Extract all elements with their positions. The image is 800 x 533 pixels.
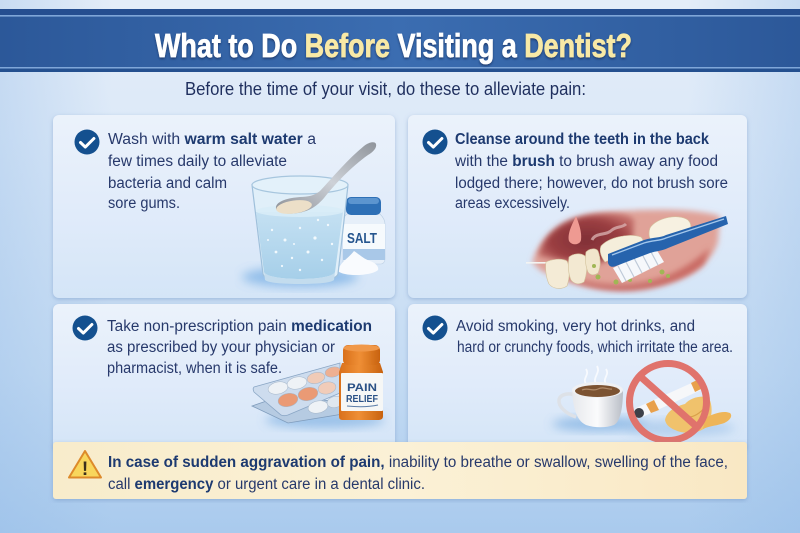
pills bbox=[267, 365, 344, 415]
text: brushing: Cleanse around the teeth in the back bbox=[455, 131, 709, 148]
illustration: coffee, no-smoking sign and chips bbox=[552, 364, 735, 440]
cup bbox=[559, 394, 576, 417]
text: medication: pharmacist, when it is safe. bbox=[107, 360, 282, 377]
text: medication: as prescribed by your physician or bbox=[107, 339, 335, 356]
text: salt water: Wash with warm salt water a bbox=[108, 131, 316, 148]
text: salt water bbox=[108, 131, 316, 212]
text: brushing: areas excessively. bbox=[455, 195, 570, 212]
chips bbox=[665, 397, 731, 433]
illustration: mouth with toothbrush bbox=[526, 210, 728, 291]
bottle bbox=[339, 344, 383, 420]
callout: emergency warning bbox=[53, 442, 747, 499]
icon: warning triangle: ! bbox=[82, 459, 88, 480]
steam bbox=[585, 366, 607, 384]
text: salt water: sore gums. bbox=[108, 195, 180, 212]
bottle: RELIEF bbox=[346, 394, 378, 405]
check icon bbox=[422, 316, 448, 340]
title banner bbox=[0, 9, 800, 72]
check icon bbox=[74, 130, 100, 154]
toothbrush bristles bbox=[613, 247, 664, 283]
panel: pain medication bbox=[53, 304, 395, 450]
icon: glass of salt water with spoon and salt jar bbox=[242, 142, 385, 287]
no sign bbox=[630, 364, 706, 440]
salt pile bbox=[338, 251, 378, 275]
text: salt water: bacteria and calm bbox=[108, 175, 227, 192]
bottle: PAIN bbox=[347, 382, 377, 394]
salt jar: SALT bbox=[347, 230, 377, 247]
uvula bbox=[569, 216, 581, 244]
check icon bbox=[72, 316, 98, 340]
teeth bbox=[546, 259, 569, 288]
illustration: blister packs and pain relief bottle bbox=[252, 344, 385, 428]
blister pack front bbox=[253, 363, 340, 416]
salt jar bbox=[343, 197, 385, 264]
text: warning bbox=[108, 454, 728, 493]
spoon bbox=[276, 142, 376, 214]
text: warning: In case of sudden aggravation of pain, inability to breathe or swallow, swelling of the face, bbox=[108, 454, 728, 471]
text: brushing bbox=[454, 131, 728, 212]
gums bbox=[532, 210, 720, 288]
text: medication: Take non-prescription pain medication bbox=[107, 318, 372, 335]
plaque bbox=[592, 264, 670, 284]
text: avoid: Avoid smoking, very hot drinks, and bbox=[456, 318, 695, 335]
blister pack back bbox=[252, 396, 343, 423]
panel: avoid smoking bbox=[408, 304, 747, 450]
text: brushing: with the brush to brush away any food bbox=[454, 153, 718, 170]
text: medication bbox=[107, 318, 372, 377]
check icon bbox=[422, 130, 448, 154]
cigarette bbox=[634, 380, 701, 418]
panel: warm salt water bbox=[53, 115, 395, 298]
text: warning: call emergency or urgent care in a dental clinic. bbox=[108, 476, 425, 493]
icon: warning triangle bbox=[69, 451, 101, 480]
glass bbox=[252, 185, 348, 283]
toothbrush handle bbox=[608, 216, 728, 267]
text: salt water: few times daily to alleviate bbox=[108, 153, 287, 170]
panel: brush around back teeth bbox=[408, 115, 747, 298]
text: avoid: hard or crunchy foods, which irritate the area. bbox=[457, 339, 733, 356]
subtitle: Before the time of your visit, do these to alleviate pain: bbox=[185, 79, 586, 99]
lip line bbox=[526, 262, 546, 264]
text: brushing: lodged there; however, do not brush sore bbox=[455, 175, 728, 192]
title: What to Do Before Visiting a Dentist? bbox=[155, 27, 632, 64]
text: avoid bbox=[456, 318, 733, 356]
